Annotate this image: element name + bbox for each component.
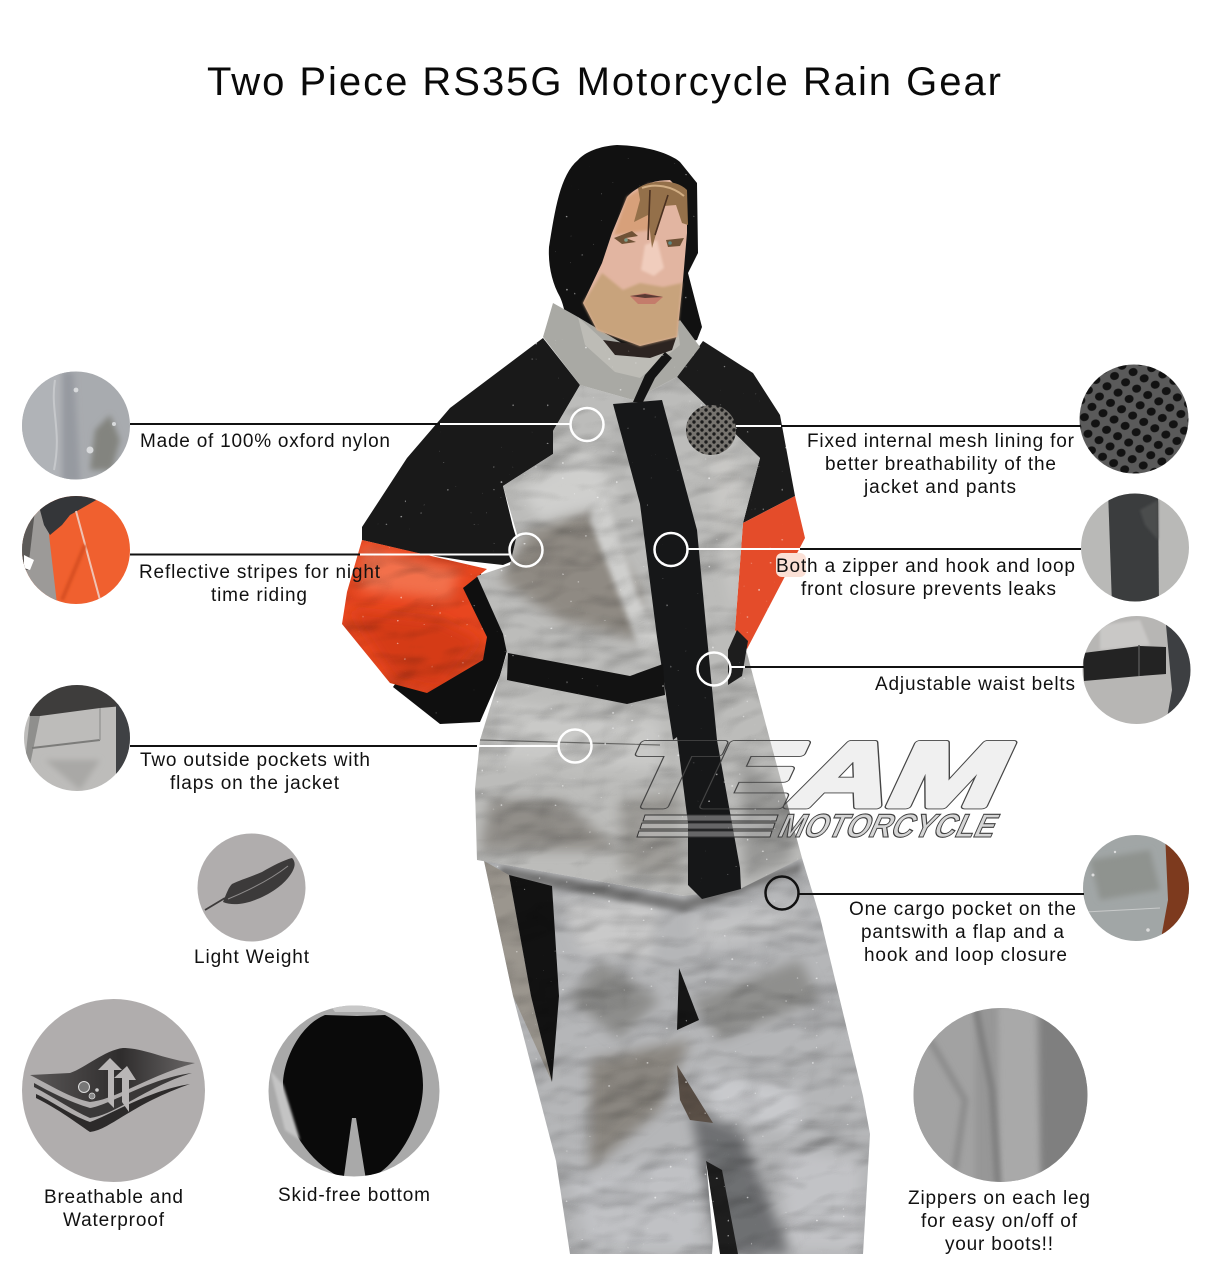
- leader line: [130, 423, 440, 425]
- feature: leg zippers: your boots!!: [945, 1234, 1053, 1255]
- pants fabric crumple: [470, 850, 880, 1260]
- lips: [630, 293, 663, 304]
- detail photo: black placket: [1081, 494, 1189, 602]
- leader line: [799, 893, 1084, 895]
- callout: reflective stripes: [20, 495, 542, 607]
- jacket body: [470, 375, 810, 900]
- callout: mesh lining: better breathability of the: [825, 454, 1056, 475]
- left orange sleeve: [340, 535, 490, 695]
- marker: mesh inset: [686, 405, 736, 455]
- marker: [698, 652, 730, 686]
- feature: leg zippers: for easy on/off of: [921, 1211, 1078, 1232]
- leader line: [130, 745, 477, 747]
- leader line: [688, 548, 800, 550]
- callout: reflective stripes: time riding: [211, 585, 307, 606]
- callout: cargo pocket: pantswith a flap and a: [861, 922, 1064, 943]
- feature: leg zippers: [908, 1005, 1092, 1255]
- detail photo: jacket pocket: [24, 685, 130, 791]
- face: [583, 180, 688, 346]
- detail photo: nylon fabric: [20, 370, 132, 482]
- sleeve fabric crumple: [340, 535, 490, 695]
- right orange sleeve: [735, 496, 805, 649]
- detail photo: reflective sleeve: [20, 495, 132, 607]
- label: Zippers on each leg: [908, 1188, 1090, 1209]
- eyes: [614, 231, 684, 247]
- hair: [634, 182, 688, 248]
- icon: fabric layers with arrows: [30, 1048, 195, 1132]
- callout: front closure: front closure prevents leaks: [801, 579, 1056, 600]
- label: Fixed internal mesh lining for: [807, 431, 1075, 452]
- detail photo: mesh: [1080, 364, 1188, 474]
- right shoulder black panel: [677, 341, 795, 523]
- feature: breathable and waterproof: Waterproof: [63, 1210, 165, 1231]
- left shoulder black panel: [362, 338, 580, 565]
- callout: mesh lining: jacket and pants: [863, 477, 1016, 498]
- detail photo: cargo pocket: [1080, 832, 1195, 944]
- pants: [470, 850, 880, 1260]
- callout: cargo pocket: [766, 832, 1195, 966]
- callout: outside pockets: [20, 680, 592, 795]
- callout: outside pockets: flaps on the jacket: [170, 773, 340, 794]
- forehead shade: [614, 183, 650, 235]
- marker: [766, 876, 798, 910]
- callout: mesh lining: [686, 364, 1188, 498]
- MOTORCYCLE: MOTORCYCLE: [773, 808, 1005, 845]
- label: Light Weight: [194, 947, 310, 968]
- label: Made of 100% oxford nylon: [140, 431, 390, 452]
- icon: feather: [205, 858, 295, 910]
- label: Breathable and: [44, 1187, 183, 1208]
- jacket fabric crumple: [470, 375, 810, 900]
- figure: model wearing rain gear: [340, 140, 880, 1260]
- leader line: [731, 666, 745, 668]
- left arm underside: [393, 572, 510, 724]
- feature: breathable and waterproof: [22, 999, 205, 1231]
- callout: cargo pocket: hook and loop closure: [864, 945, 1067, 966]
- logo stripes: [637, 815, 778, 837]
- label: Two outside pockets with: [140, 750, 370, 771]
- watermark fill behind figure: TEAM: [605, 724, 1030, 826]
- center front black strip: [613, 400, 741, 899]
- label: Adjustable waist belts: [875, 674, 1075, 695]
- label: Reflective stripes for night: [139, 562, 381, 583]
- leader line: [736, 425, 781, 427]
- zipper pull: [633, 352, 672, 402]
- feature: skid-free bottom: [265, 1000, 445, 1206]
- marker: [558, 730, 592, 762]
- title: Two Piece RS35G Motorcycle Rain Gear: [207, 60, 1001, 104]
- label halo on sleeve: [776, 553, 806, 577]
- detail photo: leg zipper: [910, 1005, 1092, 1185]
- label: Both a zipper and hook and loop: [776, 556, 1075, 577]
- waist belt: [507, 630, 748, 704]
- label: One cargo pocket on the: [849, 899, 1076, 920]
- marker: [570, 408, 604, 441]
- callout: waist belts: [698, 614, 1195, 729]
- TEAM outline: TEAM: [605, 724, 1030, 826]
- callout: oxford nylon: [20, 370, 604, 482]
- callout: front closure: [654, 490, 1193, 605]
- marker: [510, 534, 542, 566]
- collar: [543, 303, 700, 400]
- detail photo: black seat panel: [268, 1006, 440, 1176]
- feature: light weight: [194, 834, 310, 968]
- beard: [583, 273, 682, 346]
- rain specks: [340, 140, 875, 1255]
- marker: [654, 533, 688, 566]
- label: Skid-free bottom: [278, 1185, 430, 1206]
- detail photo: belt: [1080, 614, 1195, 729]
- watermark outline: Team Motorcycle: [634, 740, 1018, 838]
- leader line: [130, 554, 360, 556]
- nose: [641, 240, 664, 276]
- hood: [549, 145, 702, 352]
